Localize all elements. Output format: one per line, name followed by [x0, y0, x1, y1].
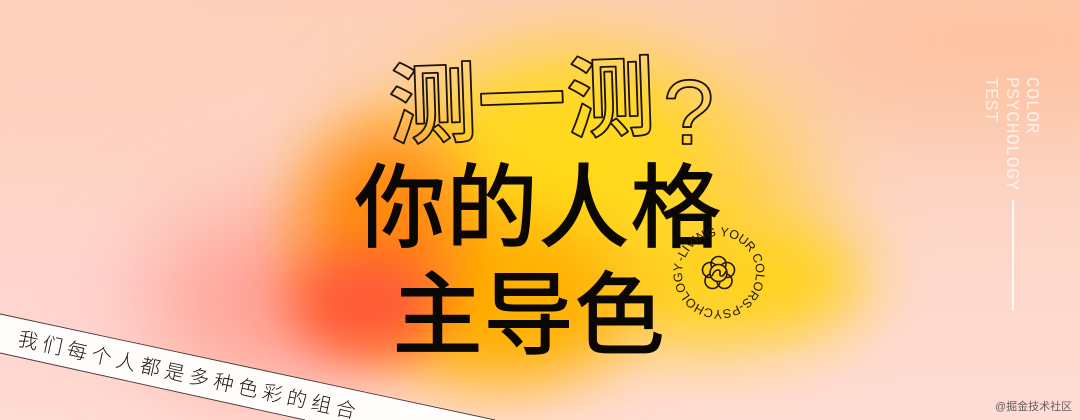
side rule — [1012, 200, 1014, 311]
side label: COLOR PSYCHOLOGY TEST — [980, 77, 1041, 191]
watermark: @掘金技术社区 — [995, 399, 1072, 413]
circular badge — [673, 227, 764, 319]
heading: 你的人格: 你的人格 — [354, 158, 722, 260]
ribbon banner — [0, 314, 495, 420]
question mark: ? — [663, 62, 714, 164]
heading: outlined 测一测？: 测一测 — [387, 48, 658, 156]
heading: 主导色: 主导色 — [392, 266, 665, 367]
side label: COLOR PSYCHOLOGY TEST: TEST — [980, 77, 1000, 123]
icon: camellia flower — [702, 256, 734, 288]
side label: COLOR PSYCHOLOGY TEST: COLOR — [1021, 77, 1041, 134]
badge ring text: -LIVING YOUR COLORS-PSYCHOLOGY — [673, 227, 764, 319]
side label: COLOR PSYCHOLOGY TEST: PSYCHOLOGY — [1001, 77, 1021, 191]
